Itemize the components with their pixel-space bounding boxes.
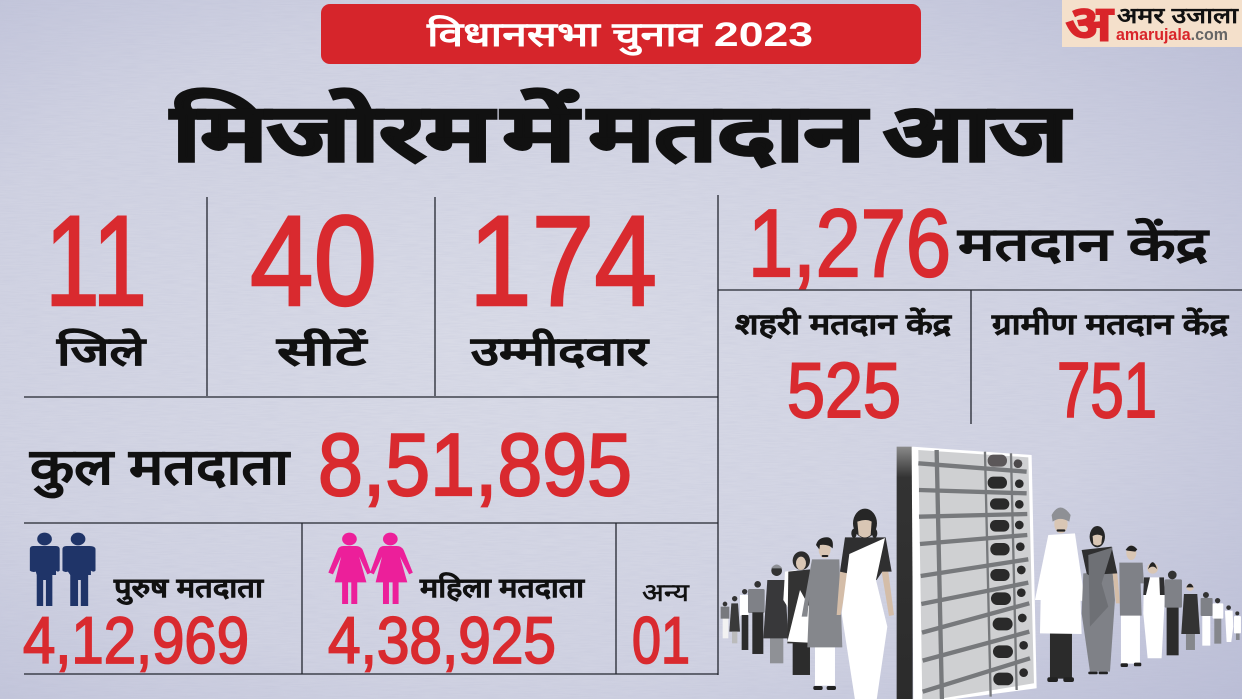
logo: Amar Ujala [1062,0,1242,51]
stat: male voters [23,533,264,677]
stat: total voters [29,415,632,514]
table grid lines [24,195,1242,675]
header banner: विधानसभा चुनाव 2023 [426,14,813,56]
voters left of EVM [721,509,894,699]
stat: female voters: महिला मतदाता [419,572,585,603]
header banner [321,4,921,64]
stat: candidates: 174 [469,190,657,333]
stat: female voters: 4,38,925 [328,603,556,677]
stat: other voters: 01 [632,603,690,677]
EVM machine [897,447,1037,699]
stat: districts [45,190,147,374]
icon: two men [30,533,96,606]
stat: seats: सीटें [275,328,369,374]
stat: districts: जिले [56,328,147,374]
stat: total voters: कुल मतदाता [29,439,291,499]
stat: male voters: 4,12,969 [23,603,249,677]
stat: urban centres: शहरी मतदान केंद्र [735,307,953,341]
stat: urban centres: 525 [787,346,901,434]
title: में [500,88,580,177]
stat: districts: 11 [45,190,147,333]
stat: other voters [632,579,690,677]
title: मिजोरम [169,88,495,177]
icon: two women [328,533,413,604]
logo: Amar Ujala: amarujala.com [1116,25,1228,44]
stat: other voters: अन्य [642,579,690,607]
stat: rural centres: ग्रामीण मतदान केंद्र [991,307,1230,341]
stat: seats: 40 [250,190,377,333]
voters right of EVM [1035,507,1241,682]
stat: polling centres: मतदान केंद्र [957,218,1210,270]
stat: total voters: 8,51,895 [318,415,632,514]
title: मतदान [586,89,869,177]
title [169,88,1072,177]
stat: rural centres [991,307,1230,434]
stat: polling centres [748,190,1210,297]
title: आज [884,89,1072,177]
stat: urban centres [735,307,953,434]
illustration: voters queue and EVM [721,447,1241,699]
stat: polling centres: 1,276 [748,190,951,297]
stat: male voters: पुरुष मतदाता [113,573,264,605]
stat: rural centres: 751 [1057,346,1157,434]
stat: female voters [328,533,585,677]
logo: Amar Ujala: अमर उजाला [1117,3,1240,28]
stat: candidates: उम्मीदवार [470,328,650,374]
